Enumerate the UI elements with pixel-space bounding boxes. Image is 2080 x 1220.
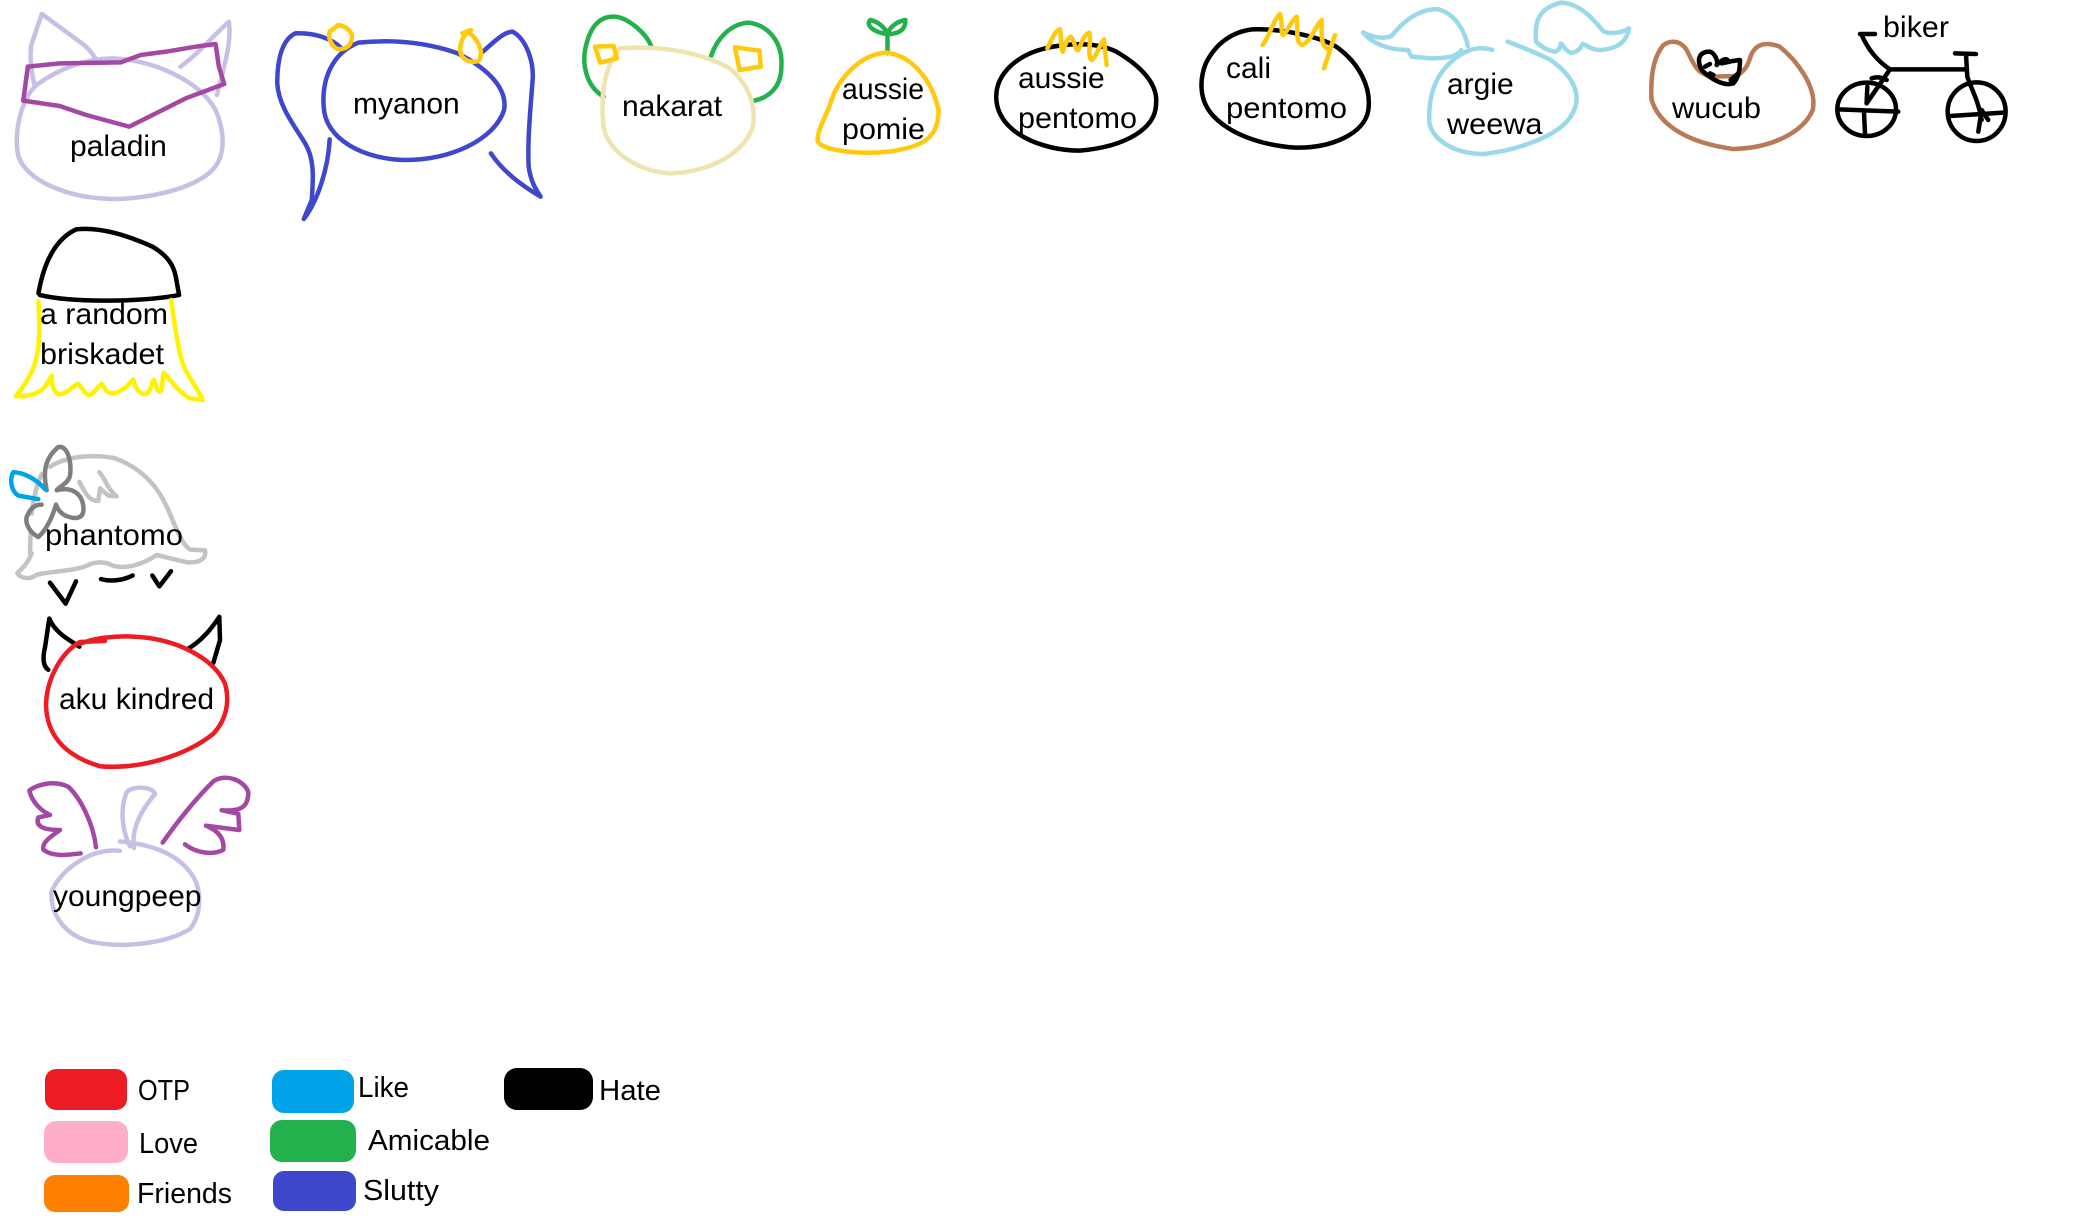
character: myanon: [277, 25, 541, 219]
character: aussie pomie: aussie: [842, 73, 924, 106]
character: aussie pomie: [818, 20, 939, 153]
character: biker: biker: [1883, 11, 1949, 44]
legend item: Friends: [44, 1175, 232, 1212]
cali pentomo hair scribble: [1263, 14, 1335, 68]
legend item: Slutty: [273, 1171, 440, 1211]
wucub hand: [1699, 52, 1740, 84]
character: cali pentomo: pentomo: [1226, 92, 1347, 125]
character: argie weewa: [1363, 3, 1629, 154]
character: youngpeep: youngpeep: [53, 880, 201, 913]
character: aku kindred: [44, 617, 227, 767]
legend item: Amicable: Amicable: [368, 1125, 490, 1157]
legend item: Love: [44, 1121, 198, 1163]
character: biker: [1837, 11, 2006, 141]
character: aussie pomie: pomie: [842, 113, 925, 146]
character: wucub: [1651, 42, 1813, 149]
legend item: Love: Love: [139, 1128, 198, 1160]
character: nakarat: [584, 17, 781, 173]
character: argie weewa: weewa: [1446, 108, 1543, 141]
character: a random briskadet: briskadet: [40, 338, 165, 371]
character: phantomo: phantomo: [45, 519, 183, 552]
character: youngpeep: [29, 778, 248, 945]
legend item: Hate: Hate: [599, 1075, 661, 1107]
briskadet wavy hem: [16, 360, 203, 400]
character: cali pentomo: [1201, 14, 1369, 148]
legend item: Amicable: [270, 1120, 490, 1162]
legend item: Like: Like: [358, 1072, 409, 1104]
legend item: OTP: [45, 1069, 190, 1110]
character: myanon: myanon: [353, 88, 460, 120]
bicycle: [1837, 34, 2006, 141]
character: paladin: [17, 14, 230, 199]
character: argie weewa: argie: [1447, 68, 1514, 101]
legend item: Like: [272, 1070, 409, 1113]
legend item: Slutty: Slutty: [363, 1175, 440, 1207]
character: aussie pentomo: pentomo: [1018, 102, 1137, 135]
legend item: Friends: Friends: [137, 1178, 232, 1210]
legend: [44, 1068, 661, 1212]
character: cali pentomo: cali: [1226, 52, 1271, 85]
legend item: Hate: [504, 1068, 661, 1110]
character: phantomo: [11, 447, 205, 604]
character: a random briskadet: a random: [40, 298, 168, 331]
character: aku kindred: aku kindred: [59, 683, 214, 716]
character: aussie pentomo: [996, 29, 1156, 151]
legend item: OTP: OTP: [138, 1075, 190, 1107]
character: paladin: paladin: [70, 130, 167, 163]
character: wucub: wucub: [1671, 92, 1761, 125]
character: aussie pentomo: aussie: [1018, 62, 1105, 95]
aussie pentomo hair scribble: [1047, 29, 1107, 65]
character: a random briskadet: [16, 229, 203, 400]
character: nakarat: nakarat: [622, 90, 723, 123]
